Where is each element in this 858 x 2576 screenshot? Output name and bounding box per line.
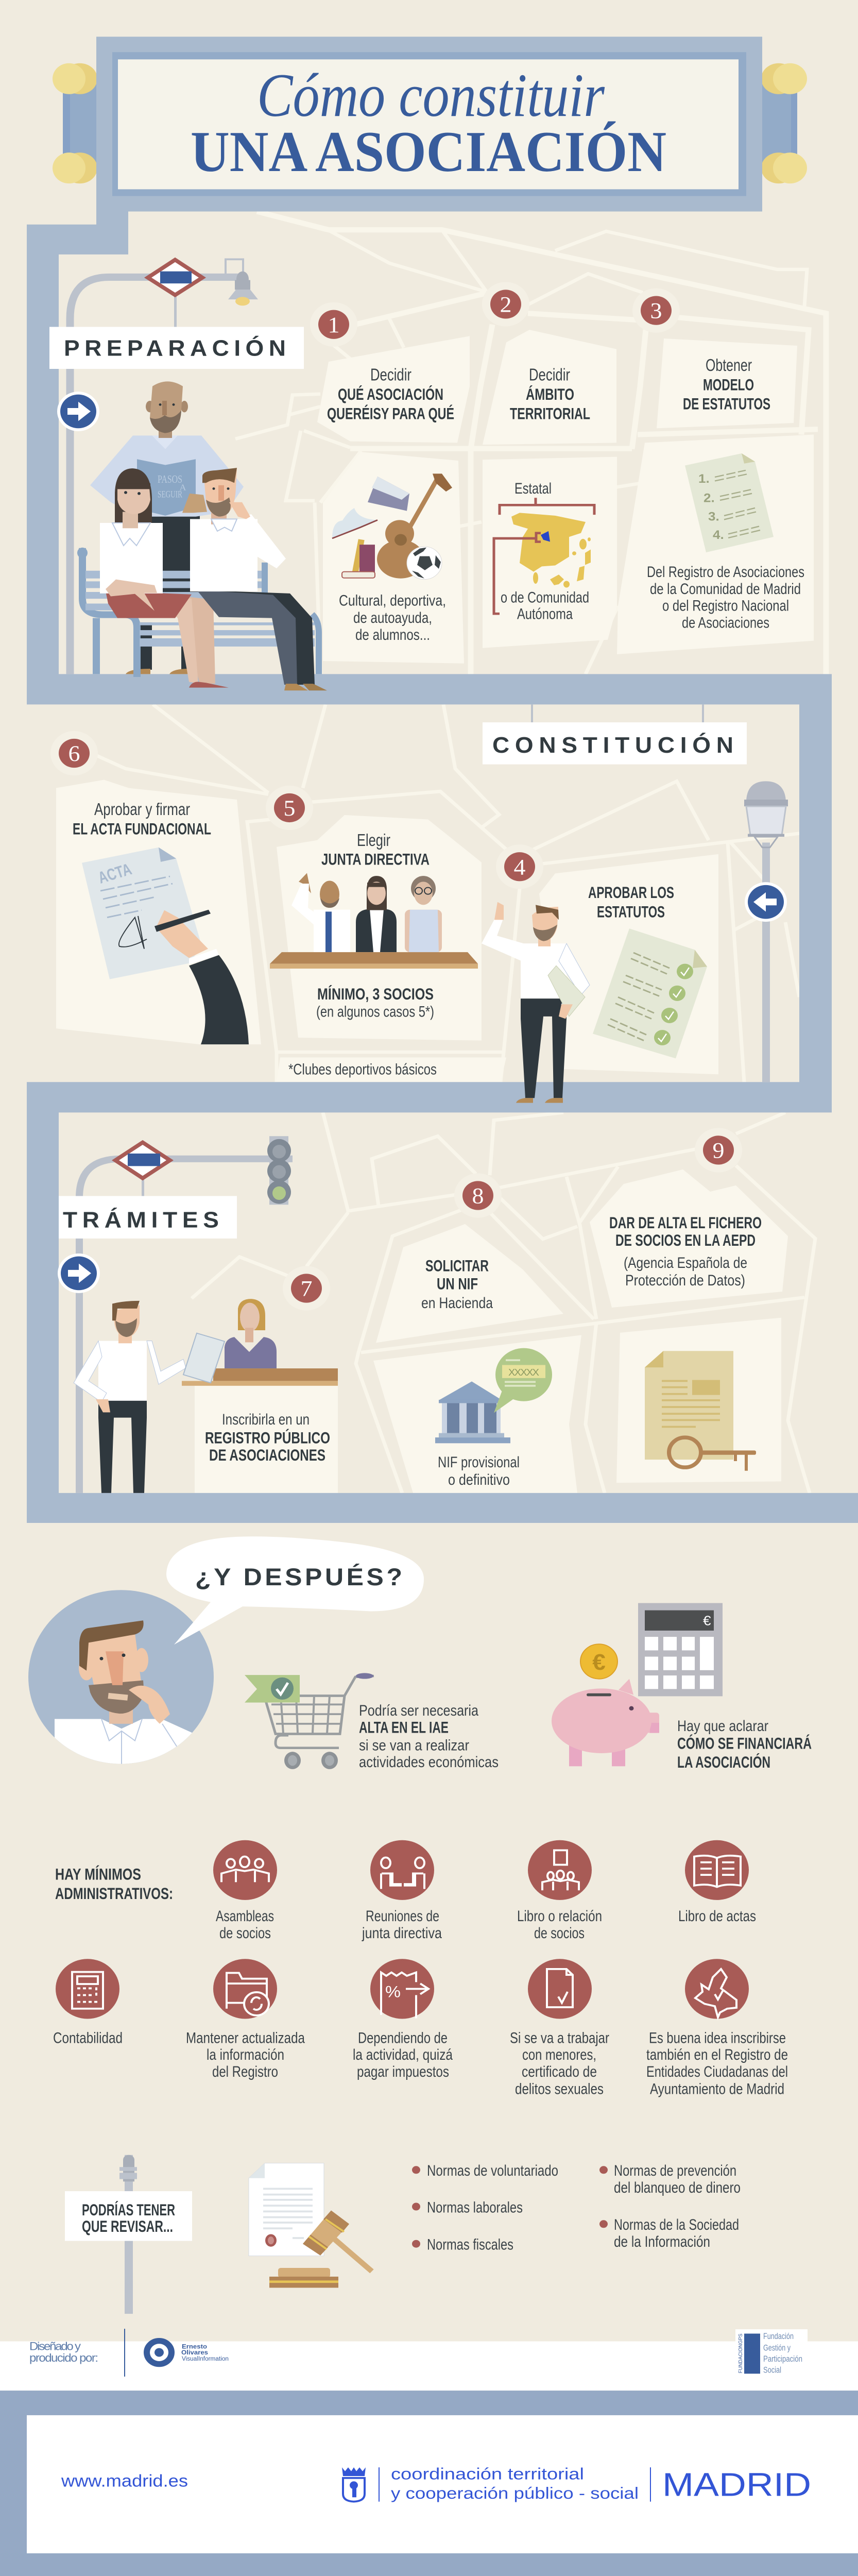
sign post: QUE REVISAR... — [82, 2217, 173, 2235]
text: cómo se financiará: Hay que aclarar — [677, 1717, 768, 1735]
logo: Ernesto Olivares: Ernesto — [182, 2343, 207, 2350]
icon: statutes document — [685, 453, 774, 552]
text: NIF provisional — [438, 1453, 520, 1488]
panel: y después — [28, 1536, 812, 1771]
text: del registro de asociaciones: o del Registro Nacional — [662, 597, 789, 614]
item: contabilidad: Contabilidad — [53, 2029, 123, 2046]
item: pagar impuestos: pagar impuestos — [357, 2063, 449, 2080]
panel: preparación — [49, 259, 804, 690]
text: coordinación territorial: y cooperación público - social — [391, 2484, 639, 2502]
marker 7 — [283, 1266, 330, 1311]
marker 8: 8 — [472, 1183, 484, 1208]
text: aprobar y firmar — [73, 800, 211, 838]
step 5 — [266, 786, 478, 1078]
text: mínimo 3 socios: (en algunos casos 5*) — [316, 1003, 434, 1021]
text: aprobar los estatutos — [588, 883, 674, 921]
text: tipos de asociación — [339, 591, 446, 643]
icon: calculator — [638, 1603, 723, 1696]
heading: hay mínimos administrativos — [55, 1865, 173, 1903]
item: libro de actas: Libro de actas — [678, 1907, 756, 1925]
text: tipos de asociación: de alumnos... — [355, 626, 430, 643]
logo: Fundación GPS: FUNDACIONGPS — [738, 2333, 744, 2373]
item: mantener actualizada: la información — [207, 2046, 284, 2063]
item: asambleas de socios — [213, 1840, 277, 1942]
text: estatal: Estatal — [514, 480, 552, 497]
heading: constitución: CONSTITUCIÓN — [492, 733, 733, 758]
text: decidir ámbito territorial — [510, 365, 590, 422]
icon: Madrid coat of arms — [342, 2467, 380, 2502]
list: normas, column 1: Normas laborales — [427, 2198, 523, 2216]
text: aprobar los estatutos: APROBAR LOS — [588, 883, 674, 902]
text: comunidad autónoma: o de Comunidad — [501, 589, 589, 606]
heading: trámites: TRÁMITES — [63, 1208, 219, 1232]
text: diseñado y producido por: producido por: — [29, 2351, 98, 2364]
text: cómo se financiará: LA ASOCIACIÓN — [677, 1753, 770, 1771]
text: inscribirla en un registro: DE ASOCIACIONES — [209, 1446, 325, 1464]
marker 2: 2 — [500, 292, 511, 317]
bench — [77, 548, 319, 677]
item: libro de actas — [678, 1840, 756, 1925]
icon: calculator: € — [703, 1613, 711, 1628]
marker 9: 9 — [713, 1138, 724, 1163]
sign post — [65, 2155, 192, 2314]
ornament: left brackets — [53, 63, 97, 183]
marker 9 — [695, 1128, 742, 1173]
list: normas, column 2: de la Información — [614, 2233, 710, 2250]
marker 5: 5 — [284, 795, 295, 821]
icon: document and key — [645, 1351, 756, 1471]
text: obtener modelo de estatutos — [683, 355, 770, 413]
step 9 — [609, 1128, 762, 1471]
logo: Fundación GPS: Social — [763, 2365, 781, 2375]
list: normas, column 1 — [412, 2162, 558, 2253]
item: libro o relación de socios: de socios — [534, 1924, 585, 1942]
marker 2 — [482, 282, 529, 327]
sign post: PODRÍAS TENER — [82, 2200, 175, 2219]
text: coordinación territorial: coordinación territorial — [391, 2465, 584, 2483]
marker 8 — [454, 1173, 502, 1218]
list: normas, column 1: Normas de voluntariado — [427, 2162, 558, 2179]
list: normas, column 2: Normas de la Sociedad — [614, 2216, 739, 2233]
text: decidir qué asociación — [327, 365, 454, 422]
step 7 — [74, 1266, 338, 1493]
text: comunidad autónoma — [501, 589, 589, 622]
seated man — [190, 468, 327, 690]
heading: trámites — [59, 1196, 237, 1239]
title: UNA ASOCIACIÓN — [191, 120, 666, 184]
list: normas, column 1: Normas fiscales — [427, 2235, 513, 2253]
icon: shopping cart with check flag — [245, 1673, 374, 1769]
list: normas, column 2: Normas de prevención — [614, 2162, 736, 2179]
item: registro de entidades ciudadanas — [646, 1959, 788, 2097]
text: alta en el IAE — [359, 1702, 499, 1771]
speech bubble: ¿Y después? — [166, 1536, 424, 1645]
text: inscribirla en un registro: Inscribirla en un — [222, 1411, 310, 1428]
title — [191, 61, 666, 184]
item: certificado de delitos sexuales: delitos sexuales — [515, 2080, 604, 2097]
text: footnote: *Clubes deportivos básicos — [288, 1060, 437, 1078]
illustration: board members at a table — [270, 873, 478, 969]
icon: direction arrow left — [745, 882, 787, 922]
icon: direction arrow right — [58, 1253, 100, 1293]
item: pagar impuestos: la actividad, quizá — [353, 2046, 453, 2063]
illustration: bench with three people — [77, 381, 327, 690]
text: obtener modelo de estatutos: DE ESTATUTOS — [683, 395, 770, 413]
step 4 — [482, 844, 707, 1103]
logo: Madrid: MADRID — [662, 2466, 811, 2503]
illustration: man delivering paper at a registry desk — [74, 1299, 338, 1493]
illustration: man with raised hand and folder — [482, 902, 590, 1103]
icon: statutes document: 3. — [708, 510, 719, 523]
text: aprobar y firmar: Aprobar y firmar — [94, 800, 190, 819]
icon: bank building with speech bubble: XXXXX — [508, 1367, 539, 1378]
panel: title sign — [53, 37, 807, 211]
illustration: thinking man in circle — [28, 1590, 214, 1765]
logo: Ernesto Olivares: Olivares — [181, 2349, 208, 2356]
text: del registro de asociaciones: Del Registro de Asociaciones — [647, 563, 804, 581]
heading: hay mínimos administrativos: HAY MÍNIMOS — [55, 1865, 141, 1883]
icon: signing the founding act: ACTA — [95, 859, 134, 887]
icon: books, guitar and ball — [332, 473, 452, 580]
seated woman — [100, 468, 229, 688]
text: alta en el IAE: actividades económicas — [359, 1753, 499, 1771]
text: cómo se financiará — [677, 1717, 812, 1771]
text: inscribirla en un registro — [205, 1411, 330, 1464]
title: Cómo constituir — [257, 61, 605, 129]
standing man: A — [180, 482, 186, 492]
icon: euro coin — [580, 1644, 617, 1679]
text: NIF provisional: NIF provisional — [438, 1453, 520, 1471]
text: solicitar un NIF — [421, 1257, 493, 1312]
street map background — [56, 211, 826, 1493]
heading: hay mínimos administrativos: ADMINISTRATIVOS: — [55, 1884, 173, 1903]
text: decidir qué asociación: QUÉ ASOCIACIÓN — [338, 385, 443, 403]
step 8 — [421, 1173, 552, 1488]
icon: direction arrow right — [57, 392, 99, 431]
marker 3: 3 — [650, 298, 662, 323]
text: obtener modelo de estatutos: MODELO — [703, 375, 754, 394]
icon: signing the founding act — [82, 848, 249, 1044]
marker 6: 6 — [68, 741, 80, 766]
item: certificado de delitos sexuales: certificado de — [522, 2063, 597, 2080]
item: mantener actualizada: del Registro — [212, 2063, 278, 2080]
text: solicitar un NIF: SOLICITAR — [425, 1257, 489, 1275]
text: website: www.madrid.es — [61, 2471, 188, 2490]
logo: Fundación GPS: Gestión y — [763, 2343, 791, 2352]
item: mantener actualizada: Mantener actualizada — [186, 2029, 305, 2046]
item: reuniones de junta directiva: junta directiva — [362, 1924, 442, 1942]
panel: mínimos administrativos — [53, 1840, 788, 2097]
text: decidir qué asociación: Decidir — [370, 365, 411, 384]
step 3 — [632, 289, 804, 631]
marker 5 — [266, 786, 313, 830]
text: mínimo 3 socios — [316, 985, 434, 1021]
list: normas, column 2: del blanqueo de dinero — [614, 2179, 741, 2196]
heading: constitución — [483, 704, 747, 765]
icon: bank building with speech bubble — [435, 1348, 552, 1443]
text: elegir junta directiva: Elegir — [357, 831, 390, 850]
item: pagar impuestos — [353, 1959, 453, 2080]
text: obtener modelo de estatutos: Obtener — [706, 355, 752, 375]
text: dar de alta el fichero: DAR DE ALTA EL FICHERO — [609, 1213, 762, 1232]
text: comunidad autónoma: Autónoma — [517, 605, 573, 622]
text: alta en el IAE: Podría ser necesaria — [359, 1702, 479, 1719]
item: pagar impuestos: % — [385, 1982, 401, 2001]
item: libro o relación de socios: Libro o relación — [517, 1907, 602, 1925]
list: normas, column 2 — [599, 2162, 741, 2250]
panel: podrías tener que revisar — [65, 2155, 741, 2314]
item: certificado de delitos sexuales: Si se va a trabajar — [510, 2029, 609, 2046]
text: aprobar los estatutos: ESTATUTOS — [597, 903, 665, 921]
icon: street lantern with arrow — [744, 781, 788, 1082]
panel: trámites — [58, 1128, 762, 1493]
text: tipos de asociación: Cultural, deportiva, — [339, 591, 446, 609]
step 1 — [310, 302, 454, 643]
marker 1 — [310, 302, 357, 347]
marker 7: 7 — [301, 1276, 312, 1301]
standing man: PASOS — [158, 473, 182, 485]
item: libro o relación de socios — [517, 1840, 602, 1942]
logo: Fundación GPS — [735, 2329, 808, 2375]
item: certificado de delitos sexuales — [510, 1959, 609, 2097]
item: mantener actualizada — [186, 1959, 305, 2080]
speech bubble: ¿Y después?: ¿Y DESPUÉS? — [195, 1564, 402, 1590]
text: del registro de asociaciones: de la Comunidad de Madrid — [650, 580, 801, 598]
text: NIF provisional: o definitivo — [448, 1471, 510, 1488]
item: asambleas de socios: Asambleas — [216, 1907, 274, 1925]
panel: footer — [0, 2391, 858, 2576]
item: asambleas de socios: de socios — [219, 1924, 271, 1942]
marker 3 — [632, 289, 680, 333]
item: reuniones de junta directiva: Reuniones de — [366, 1907, 439, 1925]
text: alta en el IAE: si se van a realizar — [359, 1736, 469, 1754]
item: certificado de delitos sexuales: con menores, — [522, 2046, 596, 2063]
text: dar de alta el fichero: (Agencia Española de — [624, 1254, 747, 1272]
icon: document and gavel — [249, 2163, 372, 2287]
text: elegir junta directiva — [321, 831, 430, 868]
text: dar de alta el fichero: DE SOCIOS EN LA AEPD — [615, 1231, 756, 1249]
icon: statutes document: 1. — [698, 472, 710, 486]
step 6 — [50, 731, 249, 1044]
station wall frame — [27, 211, 858, 1523]
panel: credits band — [0, 2329, 858, 2391]
map of Spain with brackets — [494, 498, 594, 614]
heading: preparación: PREPARACIÓN — [64, 336, 286, 361]
icon: street lamp and metro sign — [70, 259, 258, 674]
sign board — [96, 37, 762, 211]
text: solicitar un NIF: en Hacienda — [421, 1294, 493, 1312]
logo: Ernesto Olivares — [147, 2341, 229, 2364]
text: decidir qué asociación: QUERÉISY PARA QUÉ — [327, 404, 454, 422]
text: decidir ámbito territorial: ÁMBITO — [526, 385, 574, 403]
marker 4 — [496, 844, 543, 889]
item: contabilidad — [53, 1959, 123, 2046]
marker 6 — [50, 731, 98, 775]
marker 1: 1 — [328, 312, 339, 337]
icon: traffic light and metro sign — [79, 1136, 293, 1493]
text: aprobar y firmar: EL ACTA FUNDACIONAL — [73, 819, 211, 838]
logo: Ernesto Olivares: VisualInformation — [182, 2355, 229, 2362]
text: del registro de asociaciones — [647, 563, 804, 631]
panel: constitución — [50, 704, 788, 1103]
step 2 — [482, 282, 594, 622]
text: decidir ámbito territorial: TERRITORIAL — [510, 404, 590, 422]
marker 4: 4 — [514, 855, 525, 879]
text: coordinación territorial — [391, 2465, 651, 2502]
text: alta en el IAE: ALTA EN EL IAE — [359, 1718, 449, 1736]
item: registro de entidades ciudadanas: también en el Registro de — [646, 2046, 788, 2063]
text: inscribirla en un registro: REGISTRO PÚBLICO — [205, 1428, 330, 1447]
text: decidir ámbito territorial: Decidir — [529, 365, 570, 384]
item: registro de entidades ciudadanas: Ayuntamiento de Madrid — [650, 2080, 784, 2097]
icon: statutes document: 2. — [703, 491, 715, 505]
heading: preparación — [49, 327, 304, 369]
icon: statutes with check marks — [593, 928, 707, 1058]
item: registro de entidades ciudadanas: Entidades Ciudadanas del — [646, 2063, 788, 2080]
standing man — [90, 381, 244, 674]
text: mínimo 3 socios: MÍNIMO, 3 SOCIOS — [317, 985, 434, 1003]
logo: Fundación GPS: Participación — [763, 2353, 802, 2364]
icon: piggy bank — [552, 1679, 659, 1766]
text: dar de alta el fichero: Protección de Datos) — [625, 1272, 745, 1289]
text: tipos de asociación: de autoayuda, — [353, 609, 432, 626]
ornament: right brackets — [761, 63, 807, 183]
icon: statutes document: 4. — [713, 528, 724, 542]
text: diseñado y producido por — [29, 2329, 125, 2377]
item: reuniones de junta directiva — [362, 1840, 442, 1942]
text: solicitar un NIF: UN NIF — [437, 1274, 478, 1293]
text: del registro de asociaciones: de Asociaciones — [682, 614, 769, 631]
text: dar de alta el fichero — [609, 1213, 762, 1289]
item: registro de entidades ciudadanas: Es buena idea inscribirse — [649, 2029, 786, 2046]
icon: euro coin: € — [592, 1650, 606, 1675]
text: elegir junta directiva: JUNTA DIRECTIVA — [321, 850, 430, 868]
logo: Fundación GPS: Fundación — [763, 2331, 794, 2341]
text: diseñado y producido por: Diseñado y — [29, 2340, 81, 2352]
item: pagar impuestos: Dependiendo de — [358, 2029, 448, 2046]
standing man: SEGUIR — [158, 489, 182, 500]
